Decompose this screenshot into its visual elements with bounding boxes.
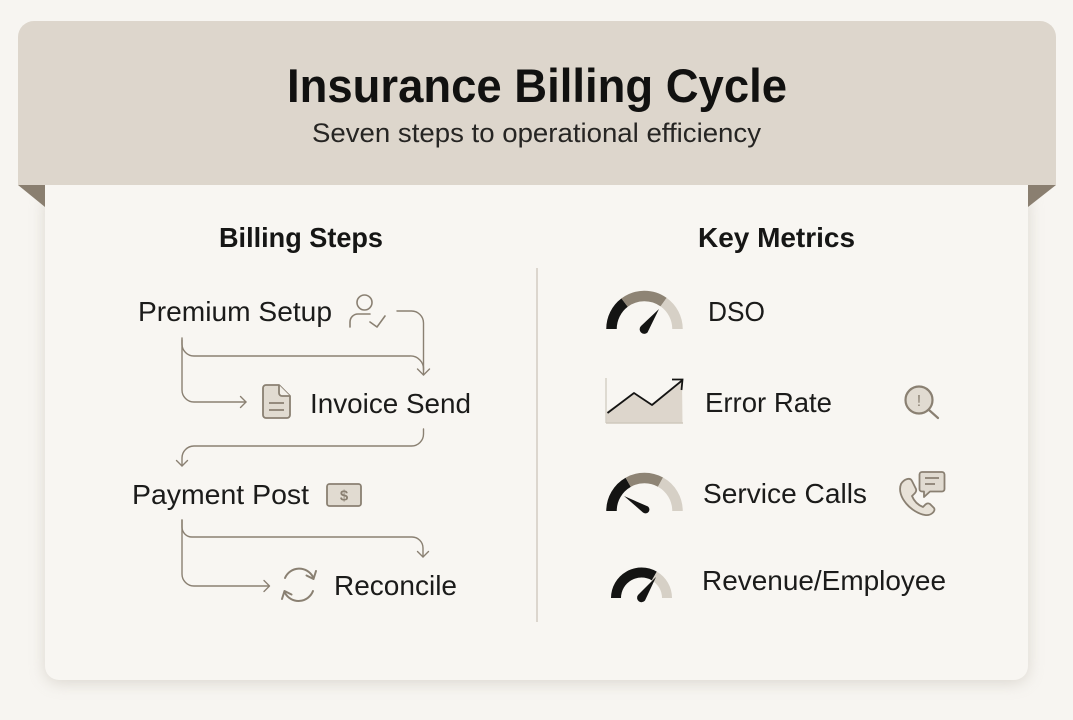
arrow: invoice send to payment post	[176, 429, 424, 466]
heading: key metrics: Key Metrics	[698, 222, 855, 253]
icon: banknote: $	[340, 488, 349, 504]
column divider	[536, 268, 538, 622]
icon: document	[263, 385, 290, 418]
step: invoice send label: Invoice Send	[310, 388, 471, 419]
arrow: premium setup to document	[182, 340, 246, 408]
header banner	[18, 21, 1056, 185]
subtitle: Seven steps to operational efficiency	[312, 118, 762, 148]
ribbon fold: right	[1028, 185, 1056, 207]
icon: magnifier with exclamation: !	[917, 393, 921, 410]
metric: error rate label: Error Rate	[705, 387, 832, 418]
step: reconcile label: Reconcile	[334, 570, 457, 601]
gauge: service calls	[612, 478, 678, 513]
arrow: payment post to reconcile (wide)	[182, 520, 428, 557]
icon: banknote	[327, 484, 361, 506]
arrow: payment post to reconcile	[182, 520, 270, 592]
arrow: premium setup to invoice send (wide)	[182, 338, 424, 370]
step: premium setup label: Premium Setup	[138, 296, 332, 327]
icon: person with check	[350, 295, 385, 327]
step: payment post label: Payment Post	[132, 479, 309, 510]
gauge: revenue per employee	[616, 573, 667, 602]
metric: service calls label: Service Calls	[703, 478, 867, 509]
arrow: premium setup to invoice send (right)	[397, 311, 430, 375]
icon: reconcile arrows	[282, 569, 316, 601]
icon: phone with speech bubble	[900, 472, 945, 515]
metric: dso label: DSO	[708, 296, 765, 327]
chart: error rate trend	[606, 378, 683, 423]
heading: billing steps: Billing Steps	[219, 222, 383, 253]
gauge: dso	[611, 296, 678, 334]
icon: magnifier with exclamation	[906, 386, 938, 418]
panel: main card	[45, 185, 1028, 683]
ribbon fold: left	[18, 185, 45, 207]
metric: revenue per employee label: Revenue/Employee	[702, 565, 946, 596]
title: Insurance Billing Cycle	[287, 59, 787, 112]
